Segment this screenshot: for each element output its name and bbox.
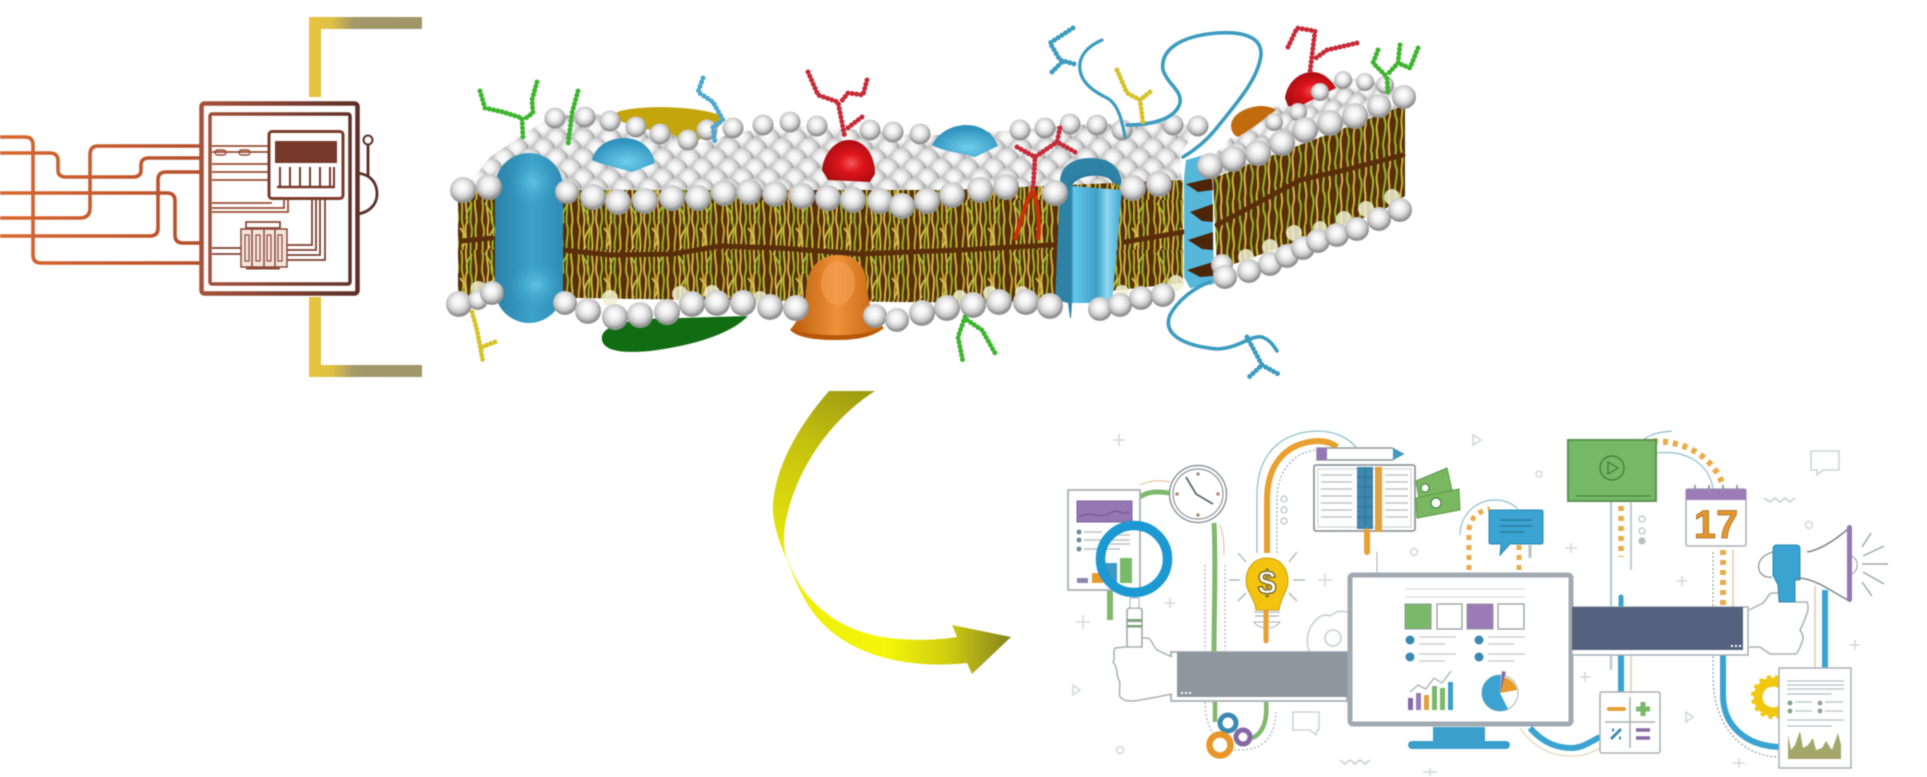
icon: lightbulb with dollar sign — [1229, 552, 1305, 641]
membrane bilayer illustration — [446, 28, 1418, 378]
orange small protein — [1231, 106, 1276, 137]
icon: monitor stand — [1408, 727, 1510, 749]
connector lines centre right — [1520, 431, 1825, 757]
lipid tails band, left — [458, 180, 1183, 303]
top lipid head surface, right section — [1205, 78, 1413, 178]
icon: green video panel — [1568, 440, 1656, 501]
icon: monitor — [1350, 575, 1571, 724]
red strand in band — [1015, 190, 1039, 240]
yellow protein behind surface — [617, 107, 724, 150]
lipid tails band, right — [1213, 105, 1405, 270]
ribbon strands — [1080, 33, 1277, 351]
glycan chains — [472, 28, 1418, 378]
icon: megaphone — [1759, 525, 1888, 602]
right hand outline — [1749, 593, 1808, 654]
blue dome protein — [592, 138, 655, 172]
squiggles — [1340, 498, 1795, 764]
icon: open notebook — [1314, 465, 1415, 575]
blue dome protein 2 — [932, 125, 998, 157]
icon: blue speech bubble — [1489, 510, 1543, 555]
monitor bar chart — [1408, 671, 1453, 710]
icon: yellow gear — [1753, 677, 1793, 717]
wires entering the panel — [0, 137, 200, 263]
bracket: gold frame top — [309, 17, 422, 97]
icon: gear outline behind monitor — [1307, 611, 1348, 652]
blue transmembrane pill protein — [495, 153, 564, 323]
icon: calculator symbols — [1600, 692, 1660, 753]
icon: pencil — [1317, 448, 1404, 460]
green protein below — [602, 316, 748, 352]
gray left sleeve — [1171, 652, 1348, 701]
blue channel protein — [1055, 158, 1122, 318]
calendar date: 17 — [1694, 503, 1738, 547]
chart bars in magnifier — [1077, 558, 1132, 583]
top lipid head surface, left section — [462, 112, 1198, 210]
back surface heads — [544, 71, 1394, 150]
icon: lightbulb with dollar sign: $ — [1258, 564, 1276, 601]
pale lower-leaflet heads — [471, 189, 1400, 306]
icon: meter display — [269, 132, 343, 198]
front lipid heads — [446, 85, 1416, 332]
icon: breaker block — [241, 222, 287, 268]
central brown midline — [462, 155, 1403, 255]
icon: banknotes — [1416, 468, 1460, 518]
bracket: gold frame bottom — [309, 297, 422, 377]
dark blue right sleeve — [1572, 607, 1748, 655]
business analytics illustration — [1068, 431, 1888, 776]
decorative plus marks and rings — [1073, 434, 1860, 776]
icon: report card with chart — [1068, 490, 1140, 590]
chat bubble outlines — [1293, 451, 1839, 735]
icon: report sheet with chart — [1779, 668, 1851, 768]
alpha-helix protein coil — [1184, 155, 1214, 288]
red dome protein — [822, 140, 875, 182]
icon: electrical panel box — [202, 104, 358, 294]
left hand outline — [1113, 638, 1172, 701]
red dome protein 2 — [1285, 72, 1336, 107]
icon: gears — [1210, 715, 1250, 756]
icon: calendar — [1686, 485, 1746, 547]
curved yellow arrow — [773, 391, 1011, 674]
monitor pie chart — [1482, 671, 1518, 711]
left connector lines — [1110, 481, 1276, 750]
orange bell protein — [790, 255, 884, 340]
orange arc and blue arc above the bulb — [1257, 431, 1358, 553]
icon: panel lever and door handle — [358, 136, 377, 214]
orange dashed line to speech bubble — [1460, 500, 1530, 571]
icon: magnifying glass — [1100, 526, 1168, 648]
icon: wall clock — [1170, 466, 1226, 522]
